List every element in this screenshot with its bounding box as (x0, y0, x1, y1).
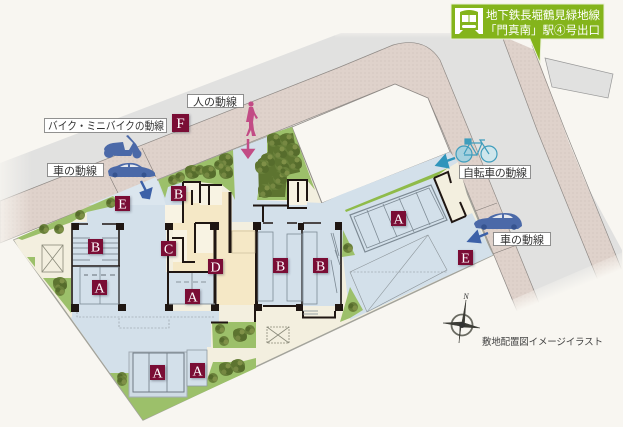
marker A centre (185, 289, 200, 306)
small north core (288, 179, 307, 208)
marker B north (171, 186, 186, 202)
icon: compass: N (462, 292, 469, 301)
icon: compass (443, 292, 480, 343)
rooms (165, 182, 222, 253)
marker A east: A (393, 212, 404, 228)
label: car route west: 車の動線 (53, 163, 97, 177)
marker B centre right: B (316, 260, 325, 274)
marker B west (88, 239, 103, 256)
icon: person (246, 101, 258, 136)
parking south (129, 350, 207, 397)
left edge cream (14, 222, 72, 318)
bicycle shed (434, 162, 472, 222)
marker A south left: A (152, 366, 163, 382)
label: car route east: 車の動線 (500, 232, 544, 246)
caption: 敷地配置図イメージイラスト (482, 336, 603, 348)
station callout: 地下鉄長堀鶴見緑地線 (486, 8, 600, 22)
parking east (350, 185, 447, 252)
arrow: bicycle (437, 156, 455, 167)
icon: car west (108, 163, 155, 178)
parking B paving (257, 222, 342, 306)
green: north-west hedge (17, 150, 235, 240)
driveway paving (88, 177, 166, 205)
station callout (451, 4, 604, 63)
parking B bays (258, 232, 340, 314)
marker C: C (164, 242, 173, 258)
white lot (292, 84, 450, 203)
marker C (161, 241, 176, 258)
marker A west (92, 280, 107, 296)
marker F (172, 114, 189, 132)
marker B centre left (273, 258, 288, 274)
label: pedestrian route: 人の動線 (193, 94, 237, 108)
building central walls (165, 182, 343, 322)
green: central garden (255, 127, 315, 200)
arrow: person (243, 139, 253, 157)
marker E east (458, 250, 473, 266)
green: south gardens (27, 168, 448, 420)
marker B centre left: B (276, 260, 285, 274)
marker D (208, 259, 223, 276)
marker E east: E (461, 252, 470, 266)
building B west (71, 223, 126, 312)
arrow: car east (469, 232, 488, 242)
marker B centre right (313, 258, 328, 274)
central walkway paving (232, 137, 493, 320)
site plan (14, 84, 493, 420)
label: car route east (494, 232, 550, 246)
icon: train (455, 8, 483, 34)
marker E west (115, 196, 130, 212)
bottom cream court (207, 306, 350, 365)
label: pedestrian route (188, 94, 244, 108)
marker F: F (176, 116, 185, 132)
station callout: 「門真南」駅④号出口 (485, 23, 600, 37)
hatch box west (42, 245, 63, 272)
lower service rooms (173, 230, 187, 262)
marker B north: B (174, 188, 183, 202)
icon: bicycle (456, 139, 497, 162)
left plaza paving (71, 181, 219, 373)
marker A south right: A (192, 364, 203, 380)
marker A centre: A (187, 290, 198, 306)
label: bicycle route: 自転車の動線 (463, 165, 527, 179)
icon: scooter (104, 135, 142, 158)
central cream block (173, 192, 256, 305)
label: car route west (48, 163, 104, 177)
dashed plaza outlines (77, 312, 215, 328)
marker B west: B (91, 240, 100, 256)
arrow: car west (141, 181, 151, 198)
marker A east (391, 211, 406, 228)
marker E west: E (118, 198, 127, 212)
marker D: D (210, 260, 221, 276)
marker A south right (190, 363, 205, 380)
road network (0, 28, 623, 350)
marker A west: A (94, 282, 105, 296)
dashed pit east (350, 235, 447, 312)
marker A south left (150, 365, 165, 382)
small grey lot (545, 58, 613, 98)
lower B paving (303, 304, 335, 317)
icon: car east (474, 213, 522, 230)
label: bike route: バイク・ミニバイクの動線 (48, 118, 164, 132)
site ground (14, 127, 493, 420)
hatch box south (267, 327, 289, 343)
